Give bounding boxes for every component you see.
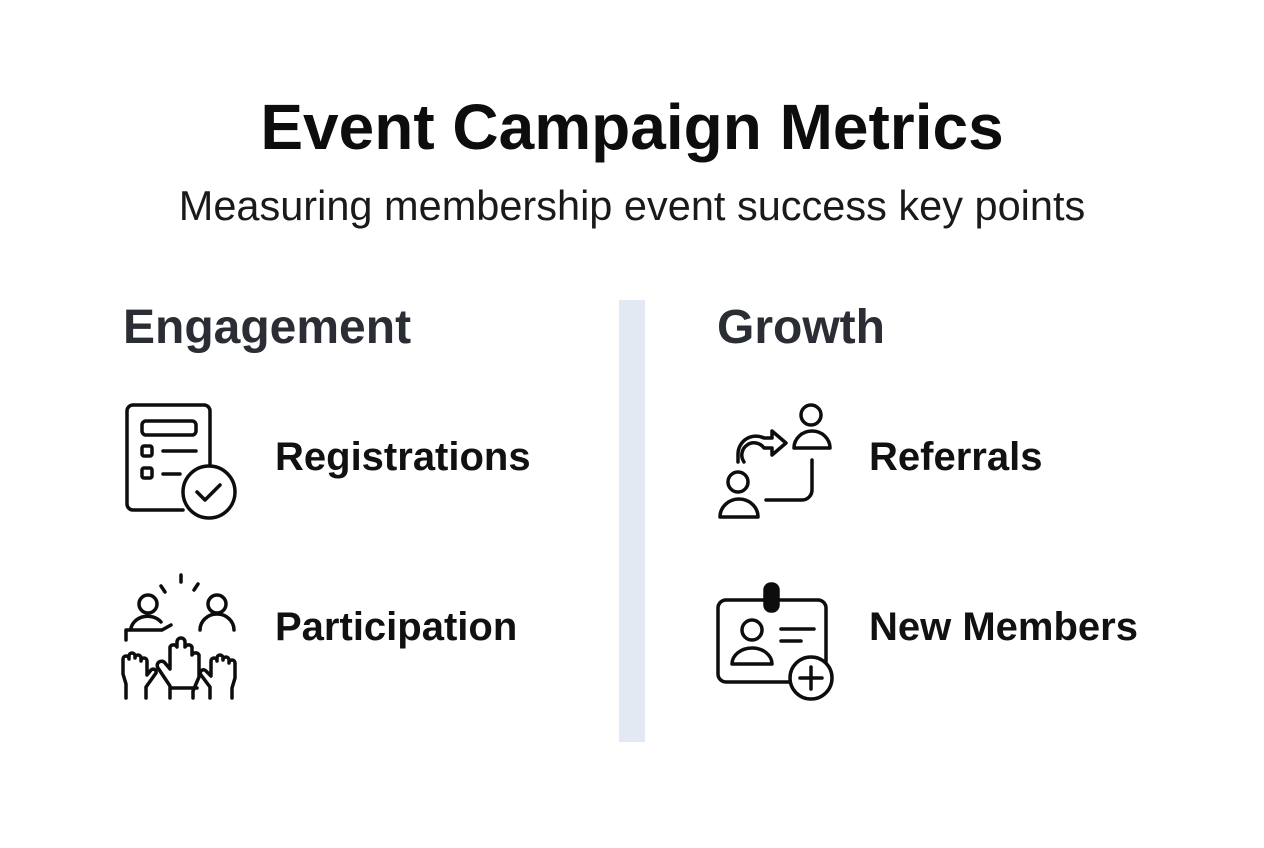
- label: Referrals: Referrals: [869, 435, 1042, 479]
- heading: Growth: Growth: [717, 301, 885, 354]
- icon: new members: [718, 584, 832, 699]
- label: New Members: New Members: [869, 605, 1138, 649]
- icon: registrations: [127, 405, 235, 518]
- divider: [619, 300, 645, 742]
- heading: Engagement: Engagement: [123, 301, 411, 354]
- icon: referrals: [720, 405, 830, 517]
- label: Participation: Participation: [275, 605, 517, 649]
- subtitle: Measuring membership event success key points: [179, 182, 1085, 229]
- title: Event Campaign Metrics: [260, 91, 1004, 163]
- label: Registrations: Registrations: [275, 435, 531, 479]
- icon: participation: [123, 575, 235, 698]
